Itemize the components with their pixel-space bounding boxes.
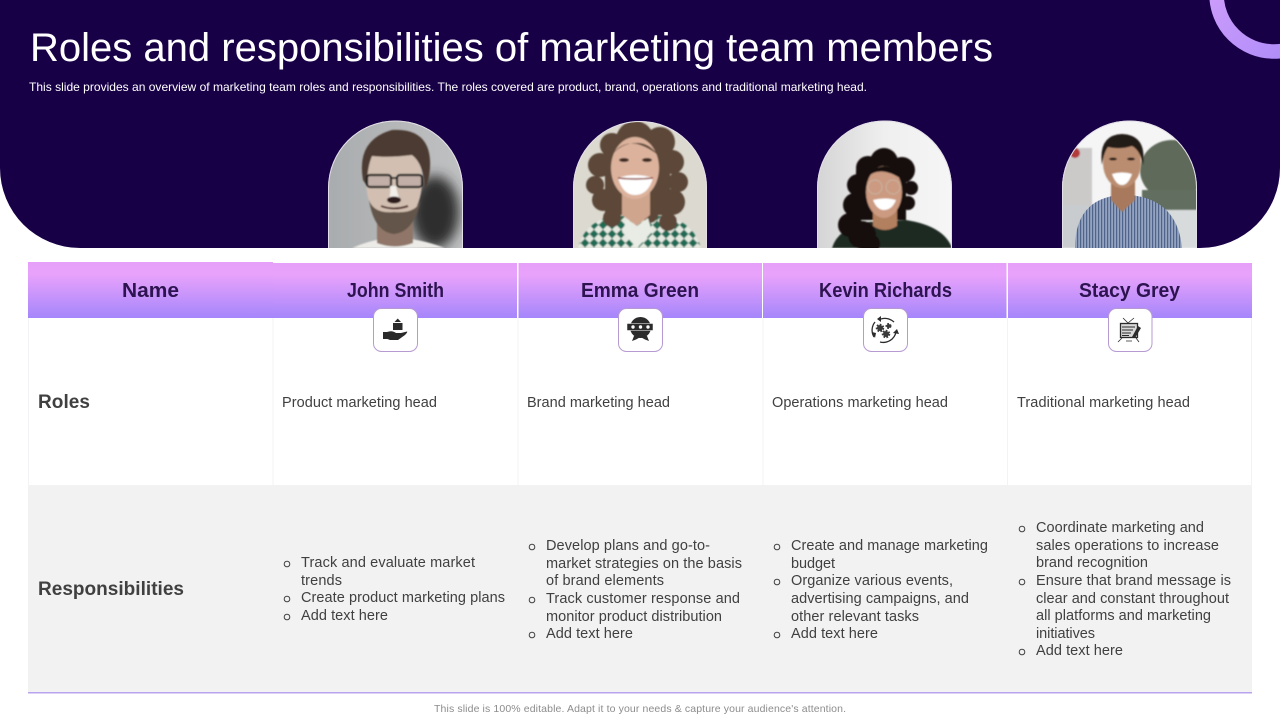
responsibilities: Emma Green: Develop plans and go-to- (546, 538, 710, 554)
header band (0, 0, 1280, 248)
responsibilities: Stacy Grey: Ensure that brand message is (1036, 573, 1231, 589)
role texts (282, 395, 1190, 411)
header row: John Smith (347, 280, 444, 302)
bottom rule (28, 692, 1252, 694)
responsibilities: Emma Green: monitor product distribution (546, 609, 722, 625)
row: roles background (28, 318, 1252, 485)
responsibilities: Kevin Richards: Organize various events, (791, 573, 953, 589)
responsibilities: Emma Green: Add text here (546, 626, 633, 642)
portrait: John Smith (327, 120, 464, 248)
responsibilities: Kevin Richards: budget (791, 556, 835, 572)
responsibilities: Kevin Richards (774, 538, 988, 642)
responsibilities: John Smith: Add text here (301, 608, 388, 624)
role texts: Product marketing head (282, 395, 437, 411)
responsibilities: Emma Green: Track customer response and (546, 591, 740, 607)
header row (28, 262, 1252, 318)
role texts: Brand marketing head (527, 395, 670, 411)
subtitle: This slide provides an overview of marketing team roles and responsibilities. The roles covered are product, brand, operations and traditional marketing head. (29, 80, 867, 94)
icon: gift on hand (374, 308, 418, 352)
responsibilities: John Smith: Track and evaluate market (301, 555, 475, 571)
header row: Kevin Richards (819, 280, 952, 302)
row: responsibilities background (28, 485, 1252, 692)
role texts: Operations marketing head (772, 395, 948, 411)
responsibilities: Emma Green: of brand elements (546, 573, 664, 589)
icon: gears with arrows (864, 308, 908, 352)
title: Roles and responsibilities of marketing team members (30, 26, 993, 70)
responsibilities: John Smith (284, 555, 505, 624)
header row: Name (122, 280, 179, 302)
responsibilities: Kevin Richards: other relevant tasks (791, 609, 919, 625)
responsibilities: John Smith: trends (301, 573, 342, 589)
responsibilities: Stacy Grey: initiatives (1036, 626, 1095, 642)
portrait: Kevin Richards (816, 120, 953, 254)
table (28, 262, 1252, 694)
decorative ring (1216, 0, 1280, 52)
portrait: Emma Green (572, 120, 708, 248)
responsibilities: Emma Green (529, 538, 742, 642)
responsibilities: Stacy Grey: sales operations to increase (1036, 538, 1219, 554)
responsibilities: Kevin Richards: Add text here (791, 626, 878, 642)
responsibilities: Kevin Richards: Create and manage marketing (791, 538, 988, 554)
responsibilities: Kevin Richards: advertising campaigns, and (791, 591, 969, 607)
icon: star badge (618, 308, 662, 352)
portrait: Stacy Grey (1061, 120, 1204, 248)
responsibilities: Stacy Grey: Coordinate marketing and (1036, 520, 1204, 536)
header row: Emma Green (581, 280, 699, 302)
responsibilities: Stacy Grey: brand recognition (1036, 555, 1148, 571)
footer note: This slide is 100% editable. Adapt it to your needs & capture your audience's attention. (434, 703, 846, 715)
icon: television with pen (1108, 308, 1152, 352)
responsibilities: Emma Green: market strategies on the basis (546, 556, 742, 572)
responsibilities: Stacy Grey (1019, 520, 1231, 659)
responsibilities: Stacy Grey: Add text here (1036, 643, 1123, 659)
responsibilities: Stacy Grey: clear and constant throughout (1036, 591, 1229, 607)
responsibilities: Stacy Grey: all platforms and marketing (1036, 608, 1211, 624)
row label: responsibilities: Responsibilities (38, 579, 184, 600)
row label: roles: Roles (38, 392, 90, 413)
header row: Stacy Grey (1079, 280, 1181, 302)
column rules (28, 318, 1252, 485)
responsibilities: John Smith: Create product marketing plans (301, 590, 505, 606)
role texts: Traditional marketing head (1017, 395, 1190, 411)
